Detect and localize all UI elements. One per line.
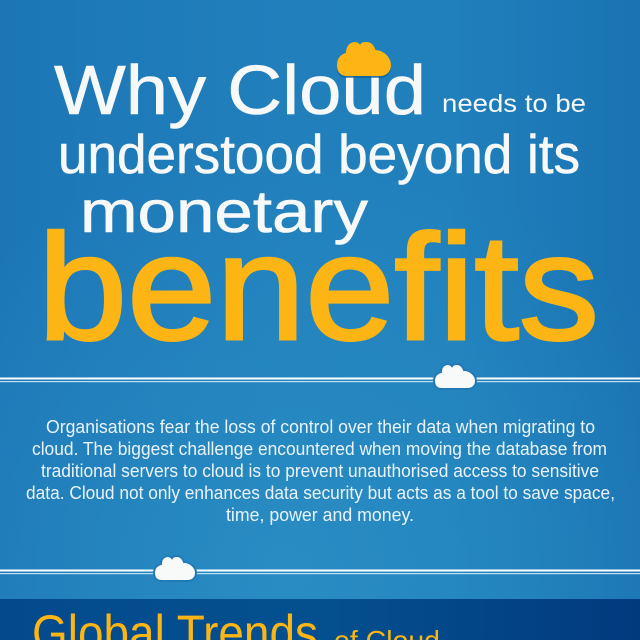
icon: white cloud lower bbox=[154, 556, 196, 581]
icon: yellow cloud bbox=[337, 42, 391, 78]
paragraph line 4: data. Cloud not only enhances data security but acts as a tool to save space, bbox=[26, 482, 615, 503]
paragraph bbox=[26, 416, 615, 525]
paragraph line 5: time, power and money. bbox=[226, 504, 414, 525]
title line: benefits: benefits bbox=[38, 203, 599, 371]
paragraph line 2: cloud. The biggest challenge encountered when moving the database from bbox=[32, 438, 607, 459]
divider with white cloud (upper) bbox=[0, 364, 640, 389]
title line: needs to be: needs to be bbox=[442, 90, 586, 118]
icon: white cloud upper bbox=[434, 364, 476, 389]
title bbox=[38, 51, 599, 371]
section band: global trends bbox=[0, 599, 640, 640]
paragraph line 3: traditional servers to cloud is to prevent unauthorised access to sensitive bbox=[41, 460, 599, 481]
paragraph line 1: Organisations fear the loss of control over their data when migrating to bbox=[46, 416, 595, 437]
title line: monetary: monetary bbox=[80, 179, 369, 245]
title line: understood beyond its: understood beyond its bbox=[58, 123, 580, 185]
divider with white cloud (lower) bbox=[0, 556, 640, 581]
title line: Why Cloud: Why Cloud bbox=[54, 51, 426, 129]
